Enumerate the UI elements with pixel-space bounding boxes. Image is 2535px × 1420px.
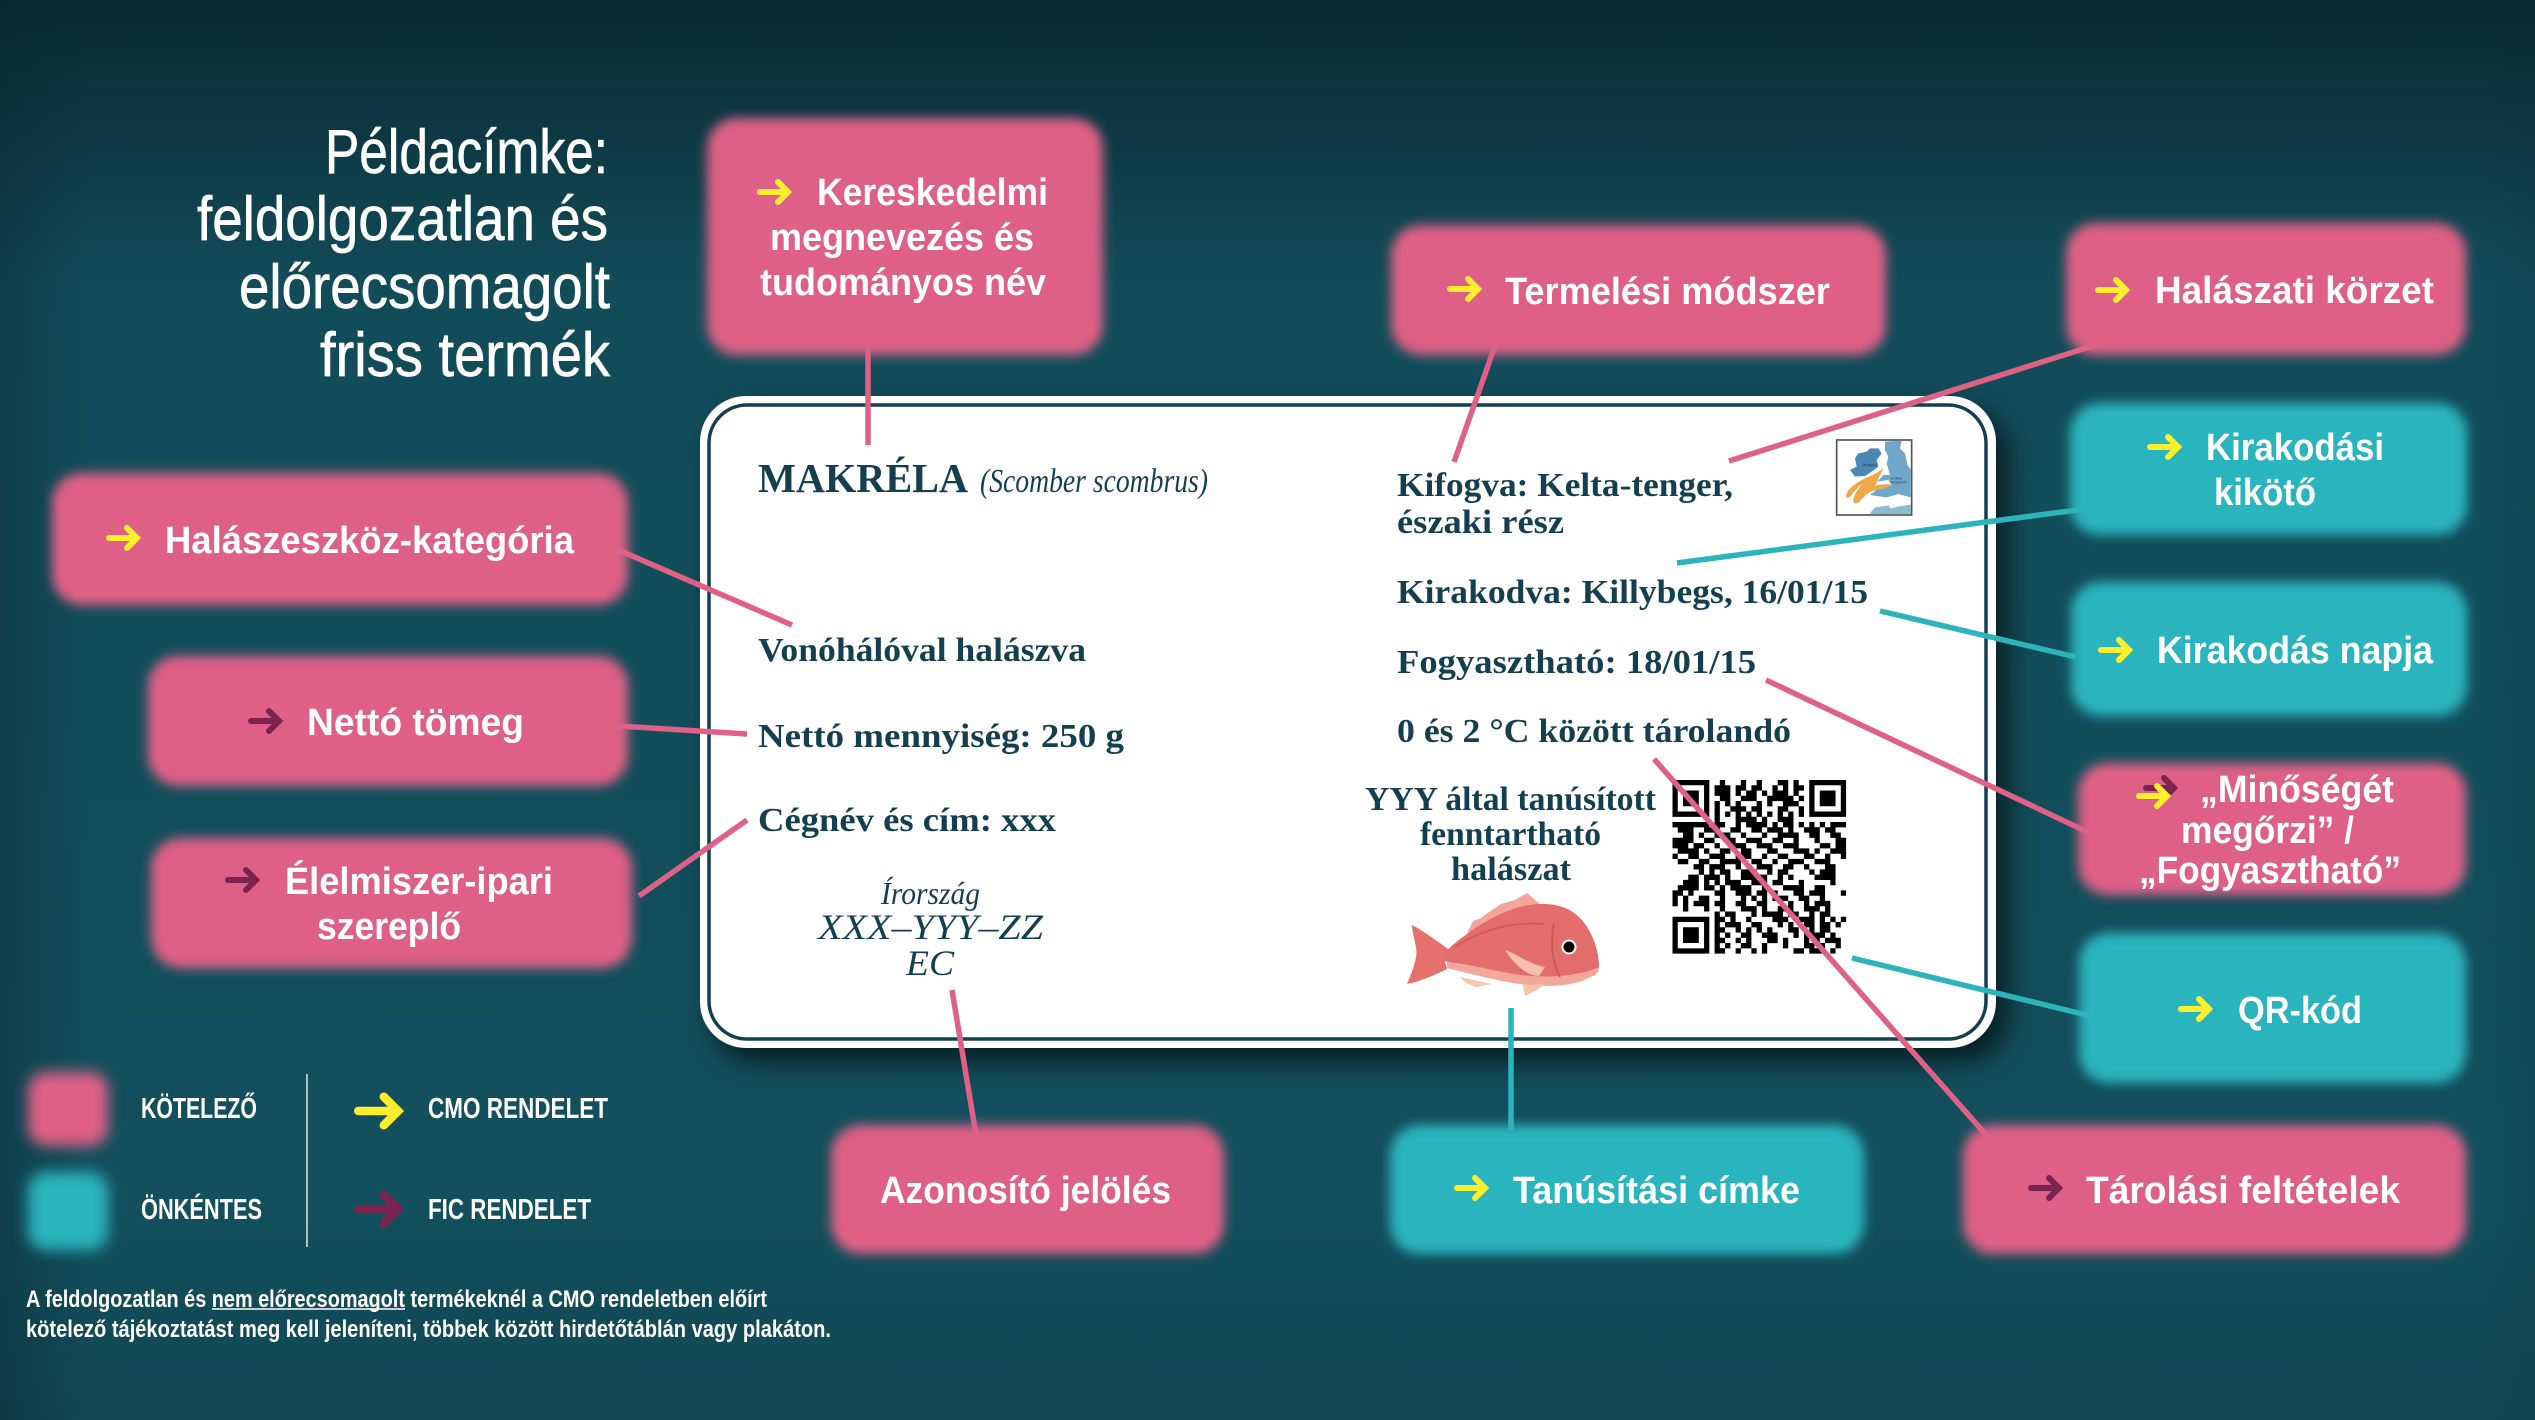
title: előrecsomagolt <box>239 253 610 322</box>
leader line: production method <box>1454 343 1496 462</box>
text: certification <box>1365 781 1657 888</box>
callout text <box>285 859 553 948</box>
callout text: Tárolási feltételek <box>2086 1170 2401 1212</box>
footnote: A feldolgozatlan és nem előrecsomagolt termékeknél a CMO rendeletben előírt <box>26 1286 767 1313</box>
title <box>197 118 611 390</box>
callout: best before or use by <box>2078 763 2466 895</box>
icon: yellow arrow <box>760 182 788 202</box>
leader line: net weight <box>618 726 747 734</box>
callout text: Termelési módszer <box>1505 271 1830 313</box>
callout: identification mark <box>831 1125 1224 1254</box>
leader line: landing date <box>1880 611 2076 657</box>
icon: map of catch area <box>1837 440 1912 515</box>
footnote <box>26 1286 831 1343</box>
callout: production method <box>1391 225 1886 355</box>
callout: certification label <box>1390 1125 1864 1254</box>
footnote: kötelező tájékoztatást meg kell jeleníteni, többek között hirdetőtáblán vagy plakáton. <box>26 1316 831 1343</box>
callout text: „Minőségét <box>2200 769 2394 811</box>
callout: net weight <box>148 656 628 786</box>
leader line: certification label <box>1508 1008 1514 1130</box>
text: product name: MAKRÉLA <box>758 455 968 501</box>
legend swatch: mandatory <box>28 1072 108 1146</box>
legend divider <box>306 1074 308 1247</box>
callout text: kikötő <box>2214 472 2316 514</box>
callout text: megőrzi” / <box>2181 810 2354 852</box>
callout text: Kirakodás napja <box>2157 630 2434 672</box>
callout: landing date <box>2071 582 2467 716</box>
text: catch area: északi rész <box>1397 504 1564 541</box>
icon: map of catch area: Ireland <box>1862 463 1877 468</box>
callout text: QR-kód <box>2238 990 2362 1032</box>
text: identification mark: EC <box>905 943 955 983</box>
callout text: Kirakodási <box>2206 427 2384 469</box>
callout text: tudományos név <box>760 262 1046 304</box>
icon: purple arrow <box>2146 778 2174 798</box>
icon: yellow arrow <box>2181 999 2209 1019</box>
leader line: catch area <box>1729 343 2102 461</box>
leader line: use by date <box>1766 680 2096 836</box>
callout text <box>2206 427 2384 514</box>
text: use by: Fogyasztható: 18/01/15 <box>1397 644 1756 681</box>
text: certification: halászat <box>1451 851 1572 888</box>
icon: purple arrow <box>2031 1178 2059 1198</box>
callout text: Kereskedelmi <box>817 172 1048 214</box>
legend label: FIC regulation: FIC RENDELET <box>428 1194 591 1226</box>
text: identification mark: XXX–YYY–ZZ <box>816 907 1044 947</box>
icon: yellow arrow <box>2150 437 2178 457</box>
icon: purple arrow <box>251 711 279 731</box>
title: Példacímke: <box>325 118 608 187</box>
legend label: CMO regulation: CMO RENDELET <box>428 1093 608 1125</box>
callout text: Élelmiszer-ipari <box>285 859 553 903</box>
title: feldolgozatlan és <box>197 185 608 254</box>
card shadow <box>712 410 2008 1062</box>
leader line: commercial name <box>865 345 871 445</box>
QR code <box>1672 780 1846 954</box>
legend icon: yellow arrow <box>358 1097 398 1125</box>
callout text: Nettó tömeg <box>307 702 524 744</box>
text: catch area: Kifogva: Kelta-tenger, <box>1397 467 1733 504</box>
callout text: Tanúsítási címke <box>1513 1170 1800 1212</box>
leader line: storage <box>1654 759 1995 1145</box>
legend icon: purple arrow <box>358 1195 398 1223</box>
icon: yellow arrow <box>2098 280 2126 300</box>
text: certification: fenntartható <box>1420 816 1601 853</box>
text: scientific name: (Scomber scombrus) <box>980 463 1208 500</box>
callout: QR code <box>2079 933 2466 1083</box>
callout text: Halászeszköz-kategória <box>165 520 575 562</box>
text: net quantity: Nettó mennyiség: 250 g <box>758 718 1124 755</box>
callout text: „Fogyasztható” <box>2139 850 2401 892</box>
callout text: Halászati körzet <box>2155 270 2434 312</box>
icon: purple arrow <box>228 870 256 890</box>
callout: food business operator <box>151 838 632 968</box>
legend <box>28 1072 608 1250</box>
text: identification mark: Írország <box>880 875 980 911</box>
leader line: food operator <box>639 820 747 896</box>
legend label: voluntary: ÖNKÉNTES <box>141 1192 262 1226</box>
callout text <box>760 172 1048 304</box>
leader line: gear category <box>616 549 792 625</box>
callout text: Azonosító jelölés <box>880 1170 1171 1212</box>
leader line: identification mark <box>952 990 976 1135</box>
callout: commercial and scientific name <box>707 118 1103 355</box>
text: certification: YYY által tanúsított <box>1365 781 1657 818</box>
panel: sample label card <box>700 396 2008 1062</box>
text: company: Cégnév és cím: xxx <box>758 802 1056 839</box>
card inner border <box>709 405 1986 1039</box>
legend swatch: voluntary <box>28 1172 108 1250</box>
text: identification mark <box>816 875 1044 983</box>
card body <box>700 396 1996 1048</box>
callout text: megnevezés és <box>770 217 1034 259</box>
icon: yellow arrow <box>109 528 137 548</box>
text: fishing gear: Vonóhálóval halászva <box>758 632 1086 669</box>
callout: storage conditions <box>1963 1125 2466 1254</box>
callout: fishing gear category <box>52 473 628 605</box>
icon: yellow arrow <box>1457 1178 1485 1198</box>
icon: yellow arrow <box>2101 640 2129 660</box>
callout: landing port <box>2070 403 2467 535</box>
callout text: szereplő <box>317 906 461 948</box>
text: catch area <box>1397 467 1733 541</box>
leader line: landing port <box>1677 508 2092 563</box>
icon: map of catch area: Kingdom <box>1891 479 1907 484</box>
icon: map of catch area: United <box>1891 475 1902 480</box>
callout: fishing area <box>2066 223 2466 355</box>
title: friss termék <box>320 321 611 390</box>
leader line: QR code <box>1852 958 2095 1017</box>
text: landing: Kirakodva: Killybegs, 16/01/15 <box>1397 574 1868 611</box>
icon: yellow arrow <box>2139 786 2167 806</box>
callout text <box>2139 769 2401 892</box>
icon: sustainable fish <box>1407 893 1599 996</box>
legend label: mandatory: KÖTELEZŐ <box>141 1091 257 1125</box>
text: storage: 0 és 2 °C között tárolandó <box>1397 713 1791 750</box>
icon: yellow arrow <box>1450 279 1478 299</box>
